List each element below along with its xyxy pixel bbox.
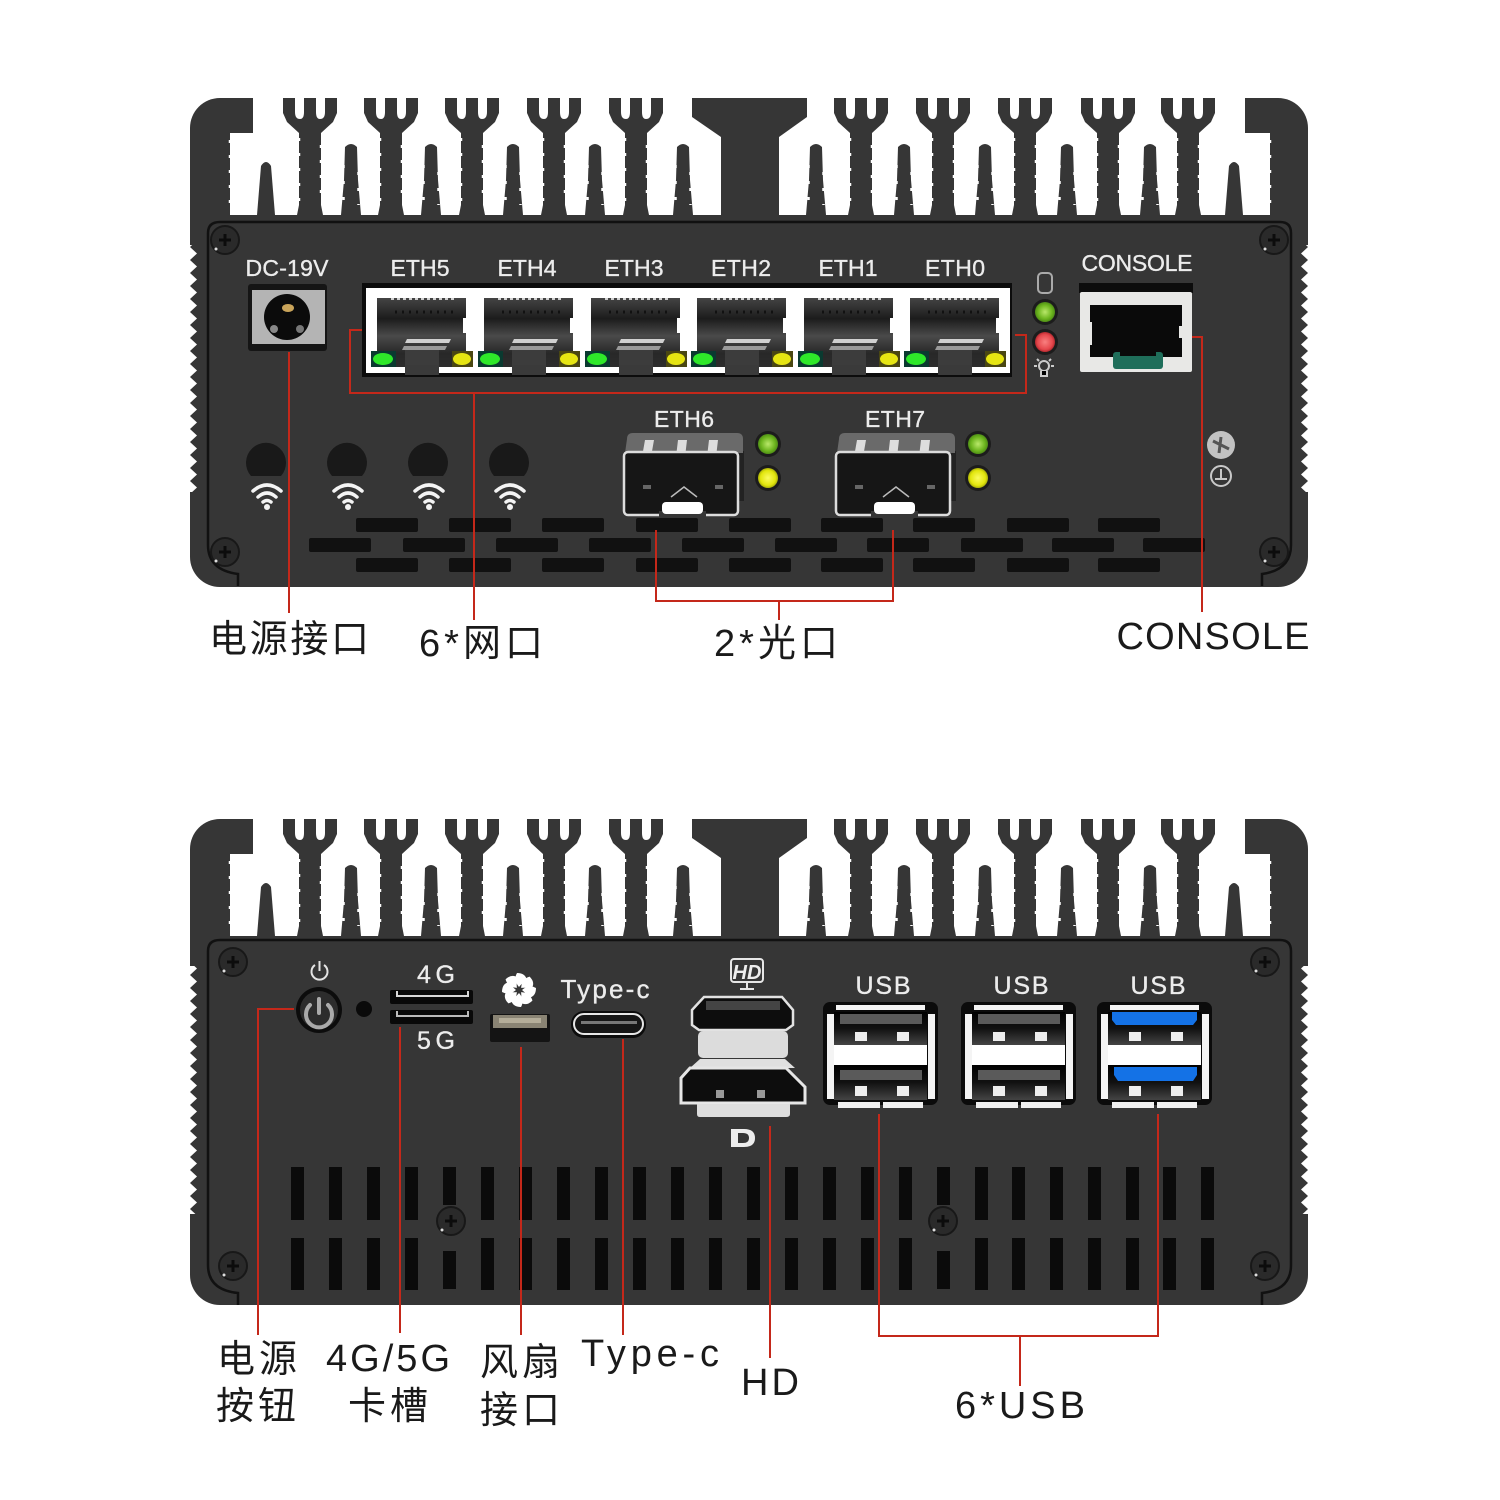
WiFi antenna holes and icons [246,443,529,510]
HD icon [731,959,763,989]
captions: bottom unit [216,1333,1085,1432]
captions: bottom unit: Type-c [581,1333,719,1375]
USB port 1 [823,1002,938,1108]
captions: bottom unit: 按钮 [216,1386,296,1428]
panel: bottom unit (IO side) [190,819,1308,1432]
ethernet labels [390,255,985,281]
power symbol [312,961,328,980]
USB port 3 (blue) [1097,1002,1212,1108]
screws [219,948,1279,1280]
label: DC-19V: DC-19V [246,255,329,281]
captions: bottom unit: 卡槽 [348,1386,428,1428]
screws [211,226,1288,566]
captions: bottom unit: 6*USB [955,1385,1085,1427]
faceplate outline [208,940,1291,1305]
callout lines: top unit [289,330,1202,620]
captions: bottom unit: HD [741,1362,799,1404]
captions: top unit: 电源接口 [209,619,369,661]
HD icon: HD [733,962,761,984]
DisplayPort icon [731,1129,755,1147]
label: ETH6: ETH6 [654,406,714,432]
Type-C port [571,1011,646,1038]
label: Type-c: Type-c [560,974,650,1004]
status LEDs [1032,273,1058,376]
vent slots [309,518,1205,572]
ethernet labels: ETH3 [604,255,664,281]
USB labels: USB [994,972,1048,1000]
captions: bottom unit: 风扇 [480,1342,560,1384]
captions: top unit [209,616,1310,665]
panel: top unit (network side) [190,98,1310,665]
label: 4G: 4G [417,961,455,989]
SFP LEDs [755,431,991,491]
captions: bottom unit: 接口 [480,1390,560,1432]
ethernet port block [362,283,1012,377]
USB labels [856,972,1186,1000]
chassis: top unit [190,98,1308,587]
label: ETH7: ETH7 [865,406,925,432]
chassis side teeth [190,245,1308,492]
captions: top unit: 6*网口 [419,623,543,665]
callout lines: bottom unit [258,1009,1158,1386]
USB port 2 [961,1002,1076,1108]
ethernet labels: ETH0 [925,255,985,281]
SFP port ETH7 [836,433,956,517]
chassis: bottom unit [190,819,1308,1305]
fan icon [501,972,537,1008]
captions: bottom unit: 4G/5G [326,1338,450,1380]
power button [296,987,342,1033]
SIM card slots [390,990,473,1024]
USB labels: USB [1130,972,1186,1000]
captions: top unit: 2*光口 [714,623,838,665]
label: 5G: 5G [417,1027,455,1055]
fan connector [490,1014,550,1042]
label: CONSOLE: CONSOLE [1082,250,1192,276]
DC power jack [248,284,327,351]
USB labels: USB [856,972,910,1000]
captions: bottom unit: 电源 [217,1339,297,1381]
cooling fins [230,819,1270,936]
ethernet labels: ETH2 [711,255,771,281]
vent slots [291,1167,1214,1290]
faceplate outline [208,222,1291,586]
ethernet labels: ETH1 [818,255,878,281]
ethernet labels: ETH4 [498,255,557,281]
HDMI and DisplayPort ports [681,997,805,1117]
captions: top unit: CONSOLE [1116,616,1310,658]
SFP port ETH6 [624,433,744,517]
reset pinhole [356,1001,372,1017]
ethernet labels: ETH5 [390,255,450,281]
cooling fins [230,98,1270,215]
ground screw and symbol [1207,431,1235,486]
chassis side teeth [190,966,1308,1214]
console port [1079,283,1193,372]
